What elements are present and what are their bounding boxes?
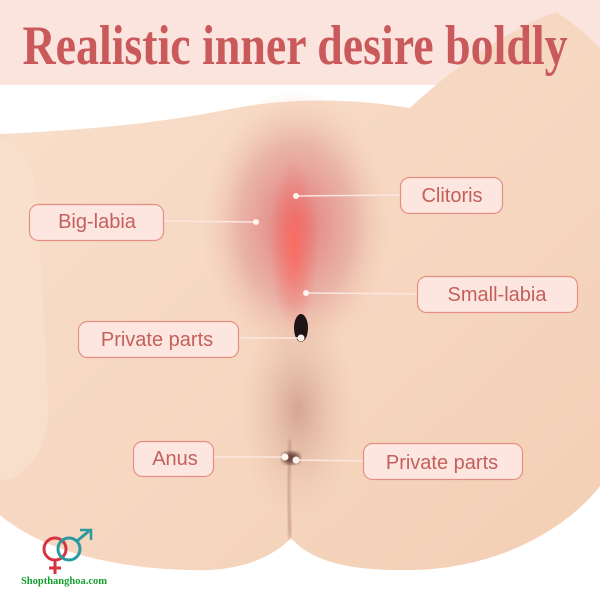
callout: Anus [134, 442, 288, 476]
callout: Clitoris [293, 178, 502, 214]
callout: Private parts left: Private parts [101, 329, 213, 351]
callout: Small-labia [303, 276, 578, 312]
callout: Private parts right: Private parts [386, 452, 498, 474]
callout: Private parts right [292, 444, 522, 480]
title banner [0, 0, 600, 85]
callout: Small-labia: Small-labia [448, 284, 547, 306]
callout: Clitoris: Clitoris [421, 185, 483, 207]
logo: gender symbols and site name: Shopthanghoa.com [21, 576, 107, 587]
title: Realistic inner desire boldly [22, 15, 568, 77]
callout: Anus: Anus [152, 448, 198, 470]
central colour gradient [201, 90, 391, 538]
logo: gender symbols and site name [21, 530, 107, 587]
callout: Big-labia: Big-labia [58, 211, 137, 233]
callout: Private parts left [78, 322, 304, 358]
callout: Big-labia [30, 204, 259, 240]
